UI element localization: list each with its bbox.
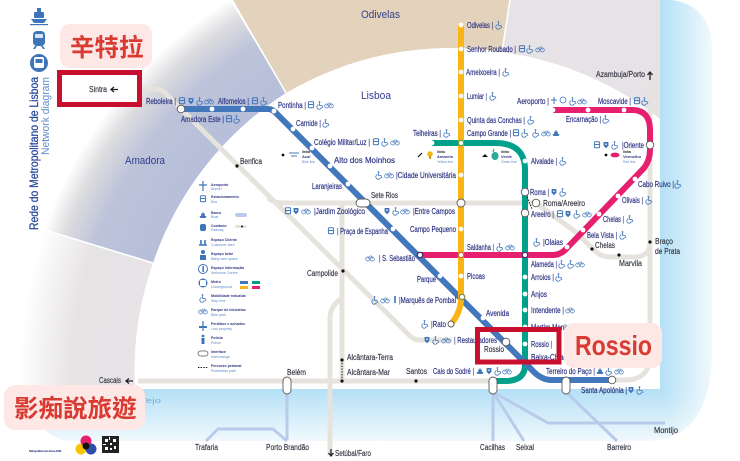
legend item: Perdidos e achados: Perdidos e achados [211,322,245,326]
legend item: Metro [198,278,260,289]
Sintra highlight frame [60,72,140,104]
rail station labels: Roma/Areeiro [543,199,585,208]
metro line: red [420,110,650,255]
station: Jardim Zoológico [285,207,365,216]
legend item: Comboio: Comboio [211,224,227,228]
station: Entre Campos: |Entre Campos [413,207,455,216]
station: Olaias: |Olaias [543,238,563,247]
station: Campo Grande [467,129,560,138]
station: Reboleira [146,97,213,106]
legend item: Estacionamento [200,195,240,204]
icon: boat [30,8,48,25]
legend item: Espaço Cliente: Customer care [211,243,235,247]
marker: Verde: Verde [501,154,513,159]
legend item: Aeroporto: Aeroporto [211,183,229,187]
station: Anjos: Anjos [531,290,547,299]
station: Pontinha: Pontinha | [278,101,306,110]
callout: 辛特拉 [60,24,152,68]
legend item: Parque de bicicletas: Bike park [211,313,226,317]
station: Quinta das Conchas: Quinta das Conchas | [467,116,525,125]
legend item: Espaço Informação: Espaço Informação [211,266,245,270]
station: Pontinha [278,101,333,110]
rail station labels: Azambuja/Porto [596,70,645,79]
legend item: Percurso pedonal [198,364,241,373]
marker: Vermelho: Red line [623,160,636,164]
marker: Amarelo: Amarelo [437,154,454,159]
marker: Verde [482,149,517,164]
rail lines [138,85,650,455]
legend item: Barco: Barco [211,211,222,215]
marker: Verde: linha [501,150,509,154]
legend item: Espaço Cliente [199,238,237,247]
rail station labels: Barreiro [607,443,631,452]
station labels: red line [517,97,681,247]
station: Roma: Roma | [530,188,549,197]
callout: Rossio: Rossio [575,330,652,361]
rail station labels: de Prata [655,247,680,256]
legend item: Mobilidade reduzida [200,294,247,303]
station: Parque: Parque [417,275,436,284]
station: Restauradores [425,336,497,345]
station: Bela Vista: Bela Vista | [587,231,617,240]
icon: metro [30,54,48,72]
legend item: Metro: Metro [211,280,222,284]
vertical title: Rede do Metropolitano de Lisboa [27,77,41,230]
station: Cais do Sodré: Cais do Sodré | [433,367,474,376]
metro line: yellow [451,25,461,324]
Sintra highlight frame: Sintra [89,85,107,94]
station: Chelas: Chelas | [603,215,624,224]
legend item: Percurso pedonal: Pedestrian path [211,369,236,373]
callout: 影痴說旅遊 [4,385,145,430]
station: Restauradores: | Restauradores [454,336,497,345]
station: Rossio metro: Rossio | [531,340,552,349]
rail station labels: Porto Brandão [266,443,309,452]
legend item: Mobilidade reduzida: Mobilidade reduzida [211,294,247,298]
legend item: Polícia [202,335,224,345]
station: Campo Grande: Campo Grande | [467,129,511,138]
station: Reboleira: Reboleira | [146,97,176,106]
panel: Odivelas zone [233,0,510,93]
legend [198,181,260,373]
legend item: Espaço Informação: Welcome Centre [211,271,238,275]
station: Laranjeiras: Laranjeiras [312,182,342,191]
station: Oriente: |Oriente [622,141,644,150]
interchanges [177,105,654,394]
station: Saldanha: Saldanha | [467,243,494,252]
rail station labels: Braço [655,237,673,246]
marker: Amarelo [418,150,454,164]
station: Entre Campos [385,207,455,216]
station: Aeroporto: Aeroporto | [517,97,549,106]
station: Alto dos Moinhos: Alto dos Moinhos [334,156,395,165]
station: Marquês de Pombal [372,296,456,305]
station: Encarnação: Encarnação | [566,115,601,124]
rail station labels: Cascais [99,376,121,385]
panel: north-east zone [502,0,660,119]
legend item: Metro: Underground [211,285,232,289]
marker: Vermelho: Vermelho [623,154,642,159]
legend item: Espaço Cliente: Espaço Cliente [211,238,237,242]
marker: Verde: Green line [501,160,517,164]
legend item: Interface [198,350,230,359]
station: Telheiras: Telheiras | [413,129,441,138]
station labels: yellow line [376,21,560,329]
station dots [210,23,637,346]
legend item: Polícia: Police [211,341,221,345]
legend item: Espaço bebé [200,250,238,261]
station: Aeroporto [517,97,586,106]
station: Moscavide: Moscavide | [598,97,631,106]
station labels: green line [413,129,591,376]
zone label: Lisboa: Lisboa [361,90,392,102]
rail station labels: Chelas [595,241,615,250]
rail station labels: Santos [406,367,427,376]
station: Colégio Militar/Luz: Colégio Militar/Luz | [314,138,370,147]
station: S. Sebastião [366,254,415,263]
station: Intendente: Intendente | [531,306,564,315]
arrows: destinations [126,72,652,456]
station: Carnide: Carnide | [296,119,321,128]
legend item: Estacionamento: Estacionamento [211,195,240,199]
station: Ameixoeira: Ameixoeira | [466,68,500,77]
station: Rato [422,320,446,329]
rail station labels: Alcântara-Terra [347,353,393,362]
legend item: Polícia: Polícia [211,336,224,340]
legend item: Espaço bebé: Espaço bebé [211,252,233,256]
station: Praça de Espanha [328,227,388,236]
legend item: Comboio: Railway [211,228,224,232]
station: Avenida: Avenida [486,309,509,318]
panel: lower left zone [19,230,153,389]
legend item: Espaço Informação [198,264,245,275]
station: Santa Apolónia: Santa Apolónia | [581,386,627,395]
station: Senhor Roubado: Senhor Roubado | [467,45,516,54]
station: Terreiro do Paço: Terreiro do Paço | [546,367,595,376]
station: Rato: |Rato [431,320,446,329]
legend item: Aeroporto [199,181,229,191]
station: Picoas: Picoas [467,272,485,281]
vertical subtitle: Network diagram [40,77,52,155]
rail station labels: Sete Rios [371,191,398,200]
zone label: Amadora: Amadora [125,155,166,167]
rail station labels: Cacilhas [480,443,505,452]
legend item: Barco: Boat [211,215,218,219]
legend item: Aeroporto: Airport [211,187,222,191]
legend item: Comboio [200,224,247,232]
rail station labels: Marvila [619,259,642,268]
Rossio highlight frame: Rossio [484,345,504,354]
marker: Azul: Azul [302,154,310,159]
zone label: Odivelas: Odivelas [361,9,400,21]
legend item: Interface: Interchange [211,355,230,359]
station: Cabo Ruivo: Cabo Ruivo | [638,180,674,189]
station labels: blue line [146,97,643,395]
station: Amadora Este: Amadora Este | [181,115,224,124]
station: Lumiar: Lumiar | [467,92,487,101]
legend item: Interface: Interface [211,350,226,354]
rail station labels: Benfica [240,157,262,166]
station: Martim Moniz: Martim Moniz [531,323,569,332]
river ferry routes [206,392,665,441]
legend item: Espaço bebé: Baby care space [211,257,238,261]
station: S. Sebastião: | S. Sebastião [379,254,415,263]
legend item: Parque de bicicletas: Parque de bicicletas [211,308,246,312]
legend item: Estacionamento: Bus [211,200,217,204]
station: Olaias [534,238,563,247]
credits text: Metropolitano de Lisboa, E.P.E. [29,449,62,453]
marker: Azul [282,150,315,164]
legend item: Parque de bicicletas [199,308,246,317]
metro line: green [432,143,525,381]
station: Odivelas: Odivelas | [467,21,493,30]
rail stops and pedestrian paths [235,164,652,383]
legend item: Mobilidade reduzida: Step free [211,299,226,303]
station: Arroios: Arroios | [531,273,554,282]
marker: Amarelo: linha [437,150,445,154]
metro line markers [282,149,642,164]
river label: Rio Tejo: Rio Tejo [120,396,161,405]
rail station labels [99,70,680,458]
line crossings [417,140,528,300]
station: Praça de Espanha: | Praça de Espanha [337,227,388,236]
station: Alvalade: Alvalade | [531,157,557,166]
rail station labels: Trafaria [195,443,218,452]
station: Baixa-Chiado: Baixa-Chiado [531,353,571,362]
station: Jardim Zoológico: |Jardim Zoológico [314,207,365,216]
legend item: Barco [200,211,247,219]
callout: Rossio [564,323,662,368]
Rossio highlight frame [478,330,559,362]
station: Areeiro [531,210,591,219]
icon: train [33,31,45,49]
station: Marquês de Pombal: |Marquês de Pombal [399,296,456,305]
legend item: Perdidos e achados [199,321,245,331]
callout: 影痴說旅遊: 影痴說旅遊 [14,395,137,423]
station: Alfornelos: Alfornelos | [218,97,249,106]
marker: Azul: Blue line [302,160,315,164]
logo: colour wheel [76,436,96,454]
rail station labels: Campolide [307,269,338,278]
rail station labels: Belém [287,368,306,377]
legend item: Perdidos e achados: Lost property [211,327,232,331]
rail station labels: Montijo [654,426,679,435]
marker: Amarelo: Yellow line [437,160,453,164]
station: Alameda [531,260,584,269]
station: Areeiro: Areeiro | [531,210,554,219]
marker: Vermelho: linha [623,150,631,154]
station: Cidade Universitária: |Cidade Universitária [396,171,456,180]
station: Olivais: Olivais | [622,196,643,205]
marker: Vermelho [605,150,642,164]
callout: 辛特拉: 辛特拉 [70,33,144,62]
station: Cidade Universitária [376,171,456,180]
legend item: Percurso pedonal: Percurso pedonal [211,364,241,368]
station: Campo Pequeno: Campo Pequeno [410,225,456,234]
marker: Azul: linha [302,150,310,154]
QR code [102,436,119,453]
rail station labels: Setúbal/Faro [335,449,371,458]
rail station labels: Alcântara-Mar [347,368,390,377]
station: Alameda: Alameda | [531,260,557,269]
rail station labels: Seixal [516,443,534,452]
panel: Amadora zone [45,0,286,263]
station: Oriente [594,141,644,150]
metro line: blue [181,109,612,380]
